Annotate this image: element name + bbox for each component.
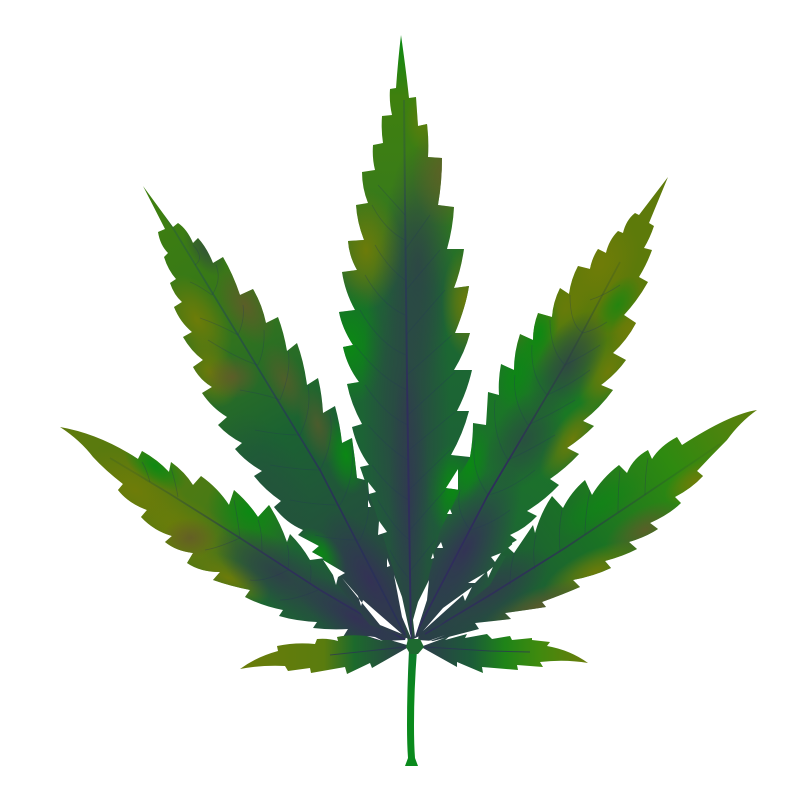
leaflet: small right <box>423 634 588 673</box>
leaflet: center <box>339 35 472 641</box>
leaflet: small left <box>240 635 407 674</box>
leaflet: lower right <box>410 405 760 653</box>
veins <box>510 458 648 585</box>
veins <box>355 185 455 580</box>
leaflet: upper left <box>143 186 408 638</box>
leaflet: lower left <box>60 427 406 641</box>
white gaps between leaflets <box>323 469 517 643</box>
stem and node <box>405 639 424 766</box>
leaflet: upper right <box>412 177 668 639</box>
veins <box>459 285 620 530</box>
veins <box>190 245 369 540</box>
infographic: cannabis leaf with discoloration <box>60 35 757 766</box>
veins <box>142 462 318 600</box>
